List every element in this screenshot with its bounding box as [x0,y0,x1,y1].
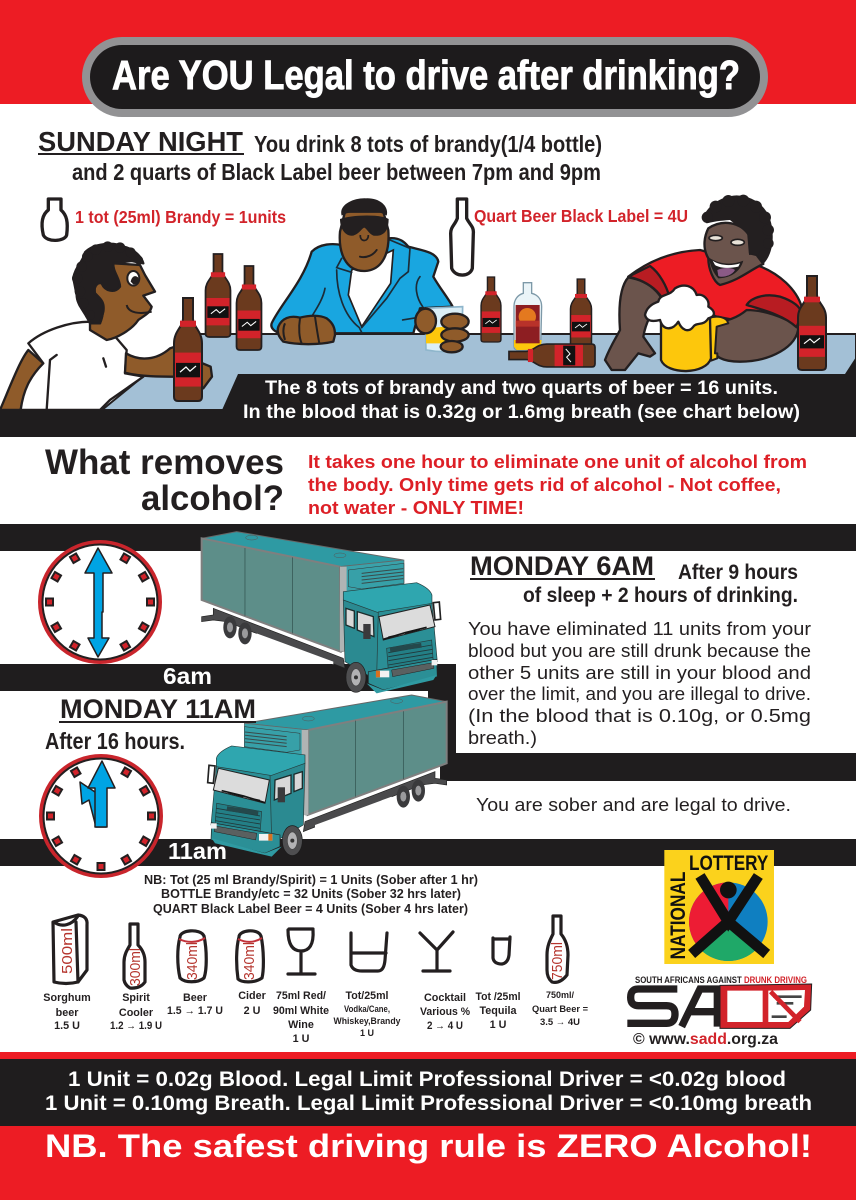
bottle held by left man [174,298,202,401]
label: 1 U [360,1028,374,1038]
drink: spirit tumbler [334,933,400,1038]
label: 2 → 4 U [427,1020,463,1032]
note: units reference: NB: Tot (25 ml Brandy/Spirit) = 1 Units (Sober after 1 hr) [144,873,478,887]
logo: SADD: © www.sadd.org.za [633,1031,778,1048]
label [476,991,520,1031]
text: Monday 6am explanation: over the limit, and you are illegal to drive. [468,684,811,704]
caption: total units [243,377,800,423]
drink: wine glass [273,929,329,1045]
title: Are YOU Legal to drive after drinking? [112,52,740,98]
text: after 9 hours [523,560,798,607]
glass and fist [415,307,469,352]
label [334,990,400,1038]
figure: man in blue jacket [271,198,469,352]
label: 1.5 → 1.7 U [167,1005,223,1017]
drink: cider can: 340ml [241,942,258,980]
note: units reference: QUART Black Label Beer = 4 Units (Sober 4 hrs later) [153,902,468,916]
truck: Monday 11am [208,695,447,857]
clock: 11am [41,756,161,876]
text: time removes alcohol: the body. Only time gets rid of alcohol - Not coffee, [308,474,781,495]
bottles on the table [206,254,595,367]
text: Monday 6am explanation: (In the blood that is 0.10g, or 0.5mg [468,706,811,726]
label [43,992,91,1032]
label [273,990,329,1045]
text: drinks description: and 2 quarts of Black Label beer between 7pm and 9pm [72,159,601,185]
text: after 9 hours: of sleep + 2 hours of drinking. [523,583,798,607]
text: Monday 6am explanation: blood but you are still drunk because the [468,641,811,661]
footer: limits panel [0,1052,856,1126]
text: time removes alcohol [308,451,807,518]
text: Monday 6am explanation [468,619,811,748]
logo: National Lottery: NATIONAL [666,872,690,959]
bar table [102,334,856,410]
bottle: right end [798,276,826,370]
logo: SADD [627,975,812,1048]
label: 6am: 6am [163,663,212,689]
label: Quart Beer = [532,1004,588,1015]
label: 75ml Red/ [276,990,326,1002]
label: 2 U [244,1005,261,1017]
label: Tot/25ml [346,990,388,1002]
label: Various % [420,1006,470,1018]
heading: what removes alcohol: What removes [45,443,284,482]
drink: beer can: 340ml [184,942,201,980]
clock: 6am [40,542,160,662]
drink: cider can [237,931,267,1017]
label: 3.5 → 4U [540,1017,580,1028]
heading: Monday 6am: MONDAY 6AM [470,551,654,581]
heading: Monday 11am: MONDAY 11AM [60,694,256,724]
icon: brandy tot bottle [42,199,67,240]
text: breath limit: 1 Unit = 0.10mg Breath. Legal Limit Professional Driver = <0.10mg breath [45,1092,812,1115]
label: Tot /25ml [476,991,520,1003]
text: drinks description [72,131,602,185]
note: units reference [144,873,478,916]
left fist [278,316,335,344]
label: Tequila [480,1005,517,1017]
truck: Monday 6am [202,532,441,693]
text: after 16 hours: After 16 hours. [45,728,185,754]
logo: National Lottery: LOTTERY [689,851,768,875]
timeline bars [0,524,856,866]
title pill [82,37,768,117]
label [420,992,470,1032]
drink: cocktail [420,932,470,1032]
drink: sorghum beer: 500ml [59,928,76,974]
text: Monday 6am explanation: breath.) [468,728,537,748]
label [167,992,223,1017]
label: 1.5 U [54,1020,80,1032]
label: quart unit: Quart Beer Black Label = 4U [474,206,688,226]
label: 1 U [490,1019,507,1031]
label: Spirit [122,992,150,1004]
drink: beer can [167,931,223,1017]
figure: man in red shirt with beer [605,195,802,371]
label [110,992,162,1032]
label: 1 U [293,1033,310,1045]
caption: total units: The 8 tots of brandy and two quarts of beer = 16 units. [265,377,778,399]
label [238,990,267,1017]
figure: left man [0,241,212,410]
drink: quart beer [532,916,588,1028]
SADD mark [627,984,812,1028]
text: blood limit: 1 Unit = 0.02g Blood. Legal Limit Professional Driver = <0.02g blood [68,1068,786,1091]
text: time removes alcohol: not water - ONLY TIME! [308,497,524,518]
icon: quart bottle [451,199,473,275]
text: time removes alcohol: It takes one hour to eliminate one unit of alcohol from [308,451,807,472]
text: Monday 6am explanation: other 5 units are still in your blood and [468,663,811,683]
text: safest rule: NB. The safest driving rule is ZERO Alcohol! [45,1128,812,1164]
label: 1.2 → 1.9 U [110,1020,162,1032]
label: Cooler [119,1007,154,1019]
label: Sorghum [43,992,91,1004]
clock hands [80,761,115,827]
drink: sorghum beer [43,915,91,1032]
drink: quart beer: 750ml [549,942,566,980]
text: after 9 hours: After 9 hours [678,560,798,584]
heading: what removes alcohol [45,443,284,518]
drink: spirit cooler [110,924,162,1032]
heading: what removes alcohol: alcohol? [141,479,284,518]
label: Wine [288,1019,314,1031]
label: Cocktail [424,992,466,1004]
heading: Sunday night: SUNDAY NIGHT [38,126,243,157]
logo: National Lottery [664,850,774,964]
clock hands [85,548,112,657]
caption: total units: In the blood that is 0.32g or 1.6mg breath (see chart below) [243,401,800,423]
label: Cider [238,990,267,1002]
label: brandy unit: 1 tot (25ml) Brandy = 1units [75,207,286,227]
logo: SADD: SOUTH AFRICANS AGAINST DRUNK DRIVING [635,975,807,985]
text: drinks description: You drink 8 tots of brandy(1/4 bottle) [254,131,602,157]
label: 90ml White [273,1005,329,1017]
text: sober statement: You are sober and are legal to drive. [476,795,791,815]
brandy bottle [514,283,542,350]
label: Vodka/Cane, [344,1004,390,1014]
label: Whiskey,Brandy [334,1016,400,1026]
label: 11am: 11am [168,838,227,864]
top red banner [0,0,856,104]
text: Monday 6am explanation: You have eliminated 11 units from your [468,619,811,639]
drink: spirit cooler: 300ml [127,948,144,986]
label: Beer [183,992,208,1004]
note: units reference: BOTTLE Brandy/etc = 32 Units (Sober 32 hrs later) [161,887,461,901]
label [532,990,588,1028]
black caption band [0,357,856,437]
drink: tequila shot [476,937,520,1031]
label: 750ml/ [546,990,574,1001]
footer: zero alcohol panel [0,1126,856,1200]
label: beer [56,1007,79,1019]
